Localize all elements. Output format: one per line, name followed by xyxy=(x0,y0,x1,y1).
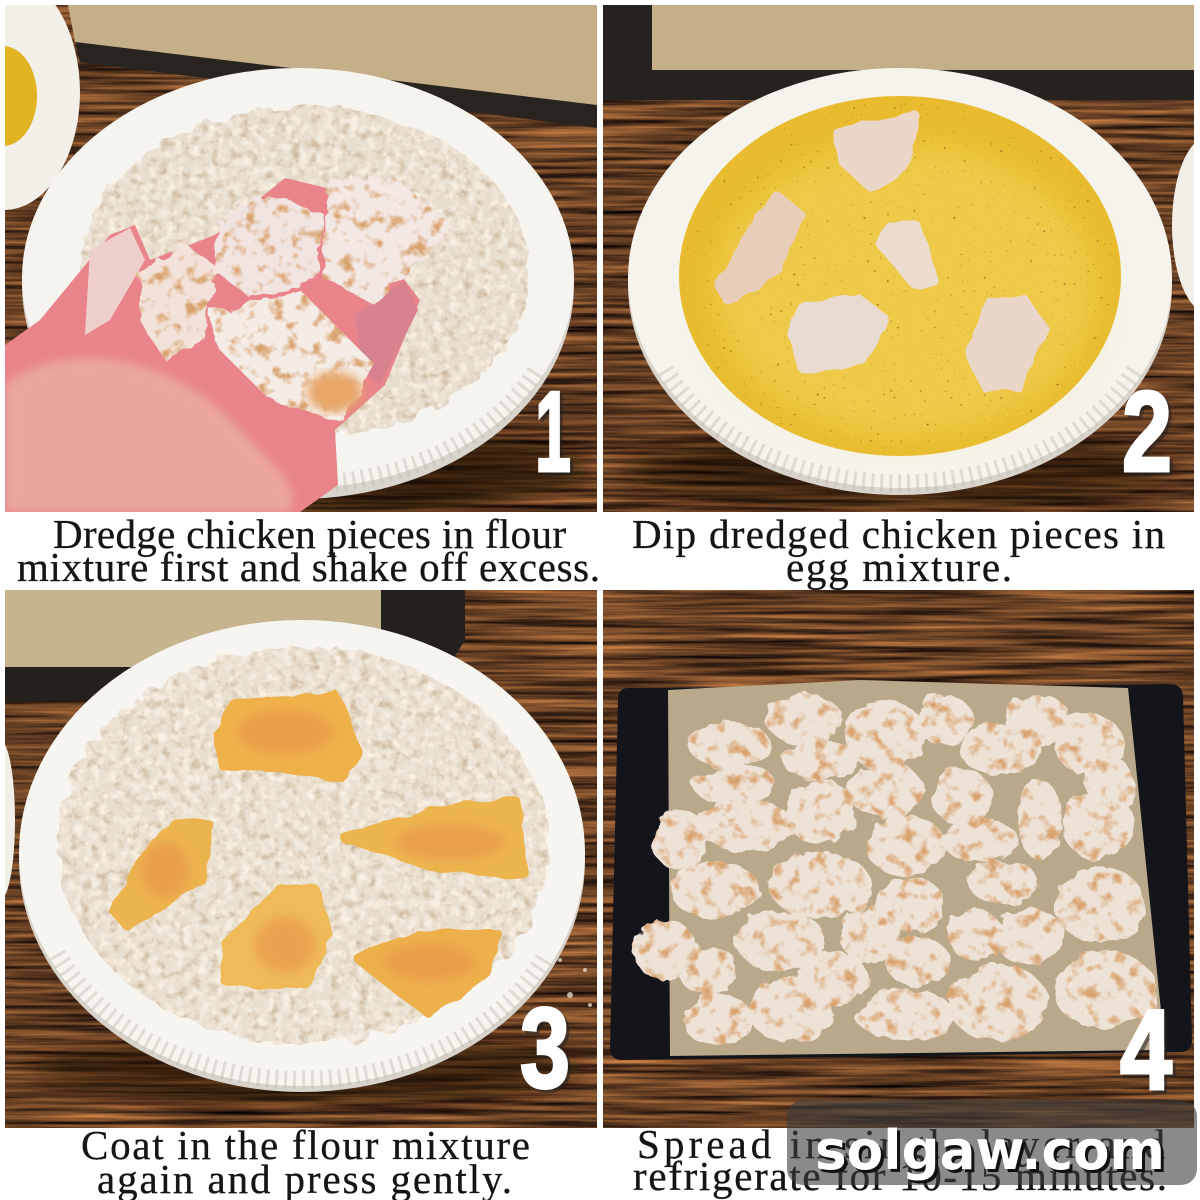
coated chicken nuggets xyxy=(633,695,1157,1046)
baking tray xyxy=(610,680,1192,1060)
bowl xyxy=(22,68,574,499)
number 1 xyxy=(535,369,574,499)
panel: step 2 photo, egg mixture bowl xyxy=(603,5,1200,512)
chicken chunks xyxy=(140,178,455,422)
caption: step 2 xyxy=(632,511,1165,590)
panel: step 4 photo, tray of coated chicken xyxy=(603,590,1194,1128)
caption: step 3 xyxy=(81,1122,530,1200)
coated chicken pieces in egg xyxy=(720,116,1045,388)
watermark: solgaw.com xyxy=(787,1100,1197,1185)
caption: step 2: egg mixture. xyxy=(786,544,1012,590)
number 1: 1 xyxy=(535,369,571,496)
panel: step 3 photo, second flour coating xyxy=(0,590,597,1128)
caption: step 4: Spread in single layer and xyxy=(637,1121,1165,1167)
number 2: 2 xyxy=(1125,372,1175,499)
number 3: 3 xyxy=(520,985,570,1112)
hand xyxy=(5,178,420,512)
panel: step 1 photo, flour bowl and hand xyxy=(0,0,597,515)
caption: step 2: Dip dredged chicken pieces in xyxy=(632,511,1165,557)
number 4: 4 xyxy=(1123,990,1175,1117)
caption: step 4 xyxy=(633,1121,1167,1199)
bowl xyxy=(628,68,1172,495)
number 4: 4 xyxy=(1120,987,1172,1114)
caption: step 1: mixture first and shake off excess. xyxy=(17,544,600,590)
egg-coated chicken pieces xyxy=(116,697,523,1014)
watermark: solgaw.com: solgaw.com xyxy=(818,1122,1168,1185)
flour speckles on wood xyxy=(558,958,592,1007)
caption: step 1: Dredge chicken pieces in flour xyxy=(53,511,566,557)
caption: step 1 xyxy=(17,511,600,590)
watermark: solgaw.com: solgaw.com xyxy=(815,1119,1165,1182)
number 2: 2 xyxy=(1122,369,1172,496)
bowl xyxy=(19,620,585,1092)
caption: step 4: refrigerate for 10-15 minutes. xyxy=(633,1153,1167,1199)
caption: step 3: Coat in the flour mixture xyxy=(81,1122,530,1168)
number 1: 1 xyxy=(538,372,574,499)
number 3: 3 xyxy=(523,988,573,1115)
